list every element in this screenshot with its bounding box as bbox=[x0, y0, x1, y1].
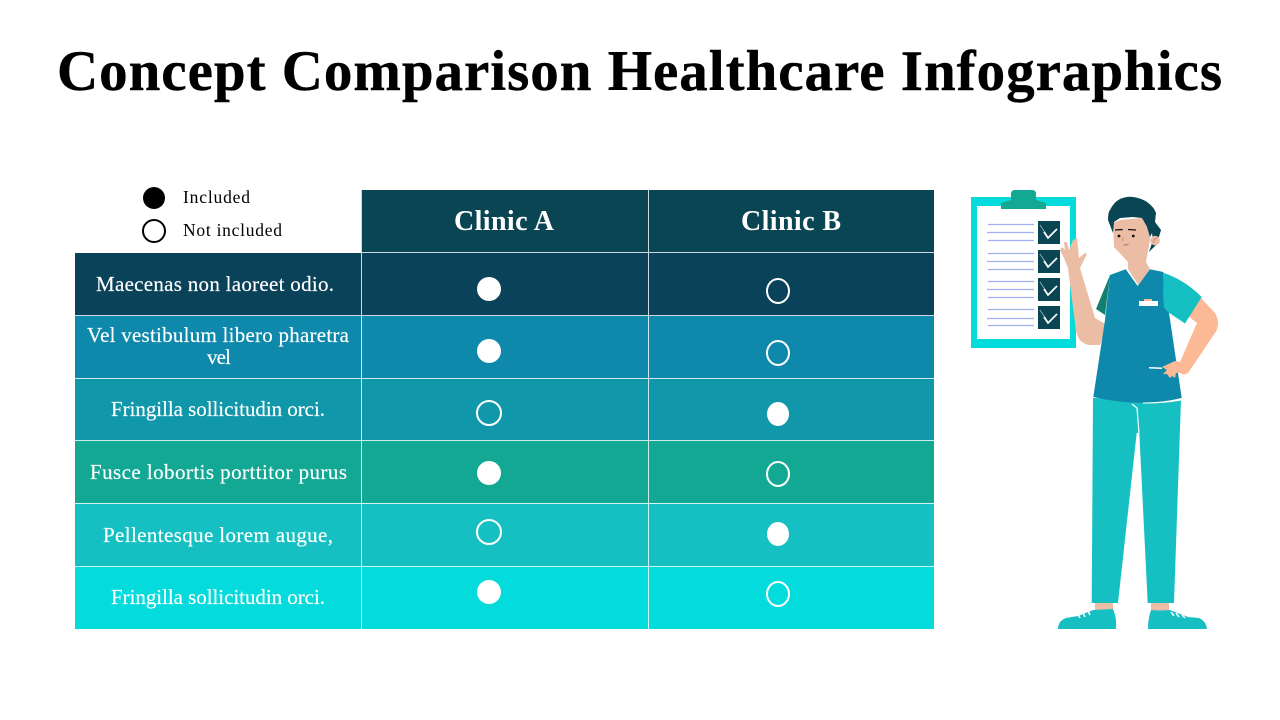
column header: Clinic B: Clinic B bbox=[741, 206, 841, 237]
pocket badge bbox=[1139, 299, 1158, 306]
ear bbox=[1150, 236, 1160, 245]
illustration: healthcare worker bbox=[1058, 197, 1218, 629]
row 3: Fringilla sollicitudin orci. bbox=[111, 397, 325, 421]
row 4: Fusce lobortis porttitor purus bbox=[90, 460, 347, 484]
comparison table bbox=[75, 190, 934, 629]
row 2: vel bbox=[207, 345, 231, 369]
shoes bbox=[1058, 609, 1207, 629]
legend bbox=[143, 187, 282, 242]
icon: check boxes bbox=[1038, 221, 1060, 329]
row 2 bbox=[75, 316, 934, 378]
row 6: Fringilla sollicitudin orci. bbox=[111, 585, 325, 609]
illustration: clipboard bbox=[971, 190, 1076, 348]
row 1 bbox=[75, 253, 934, 316]
row 4 bbox=[75, 441, 934, 503]
face bbox=[1115, 230, 1157, 245]
legend: not included: Not included bbox=[183, 220, 282, 240]
row 2: Vel vestibulum libero pharetra bbox=[87, 323, 350, 347]
row 5: Pellentesque lorem augue, bbox=[103, 523, 333, 547]
legend: included: Included bbox=[183, 187, 250, 207]
sleeves bbox=[1096, 275, 1110, 315]
tunic bbox=[1093, 269, 1182, 403]
hip arm bbox=[1162, 298, 1218, 378]
row 1: Maecenas non laoreet odio. bbox=[96, 272, 334, 296]
head and neck bbox=[1113, 218, 1150, 286]
column header: Clinic A bbox=[361, 190, 648, 253]
title: Concept Comparison Healthcare Infographics bbox=[57, 40, 1222, 103]
row 3 bbox=[75, 378, 934, 441]
row 6 bbox=[75, 566, 934, 629]
pants bbox=[1092, 398, 1181, 603]
ankles bbox=[1095, 603, 1169, 611]
hair bbox=[1108, 197, 1161, 252]
column header: Clinic B bbox=[648, 190, 934, 253]
waving arm bbox=[1060, 238, 1107, 345]
row 5 bbox=[75, 503, 934, 566]
column header: Clinic A: Clinic A bbox=[454, 206, 555, 237]
